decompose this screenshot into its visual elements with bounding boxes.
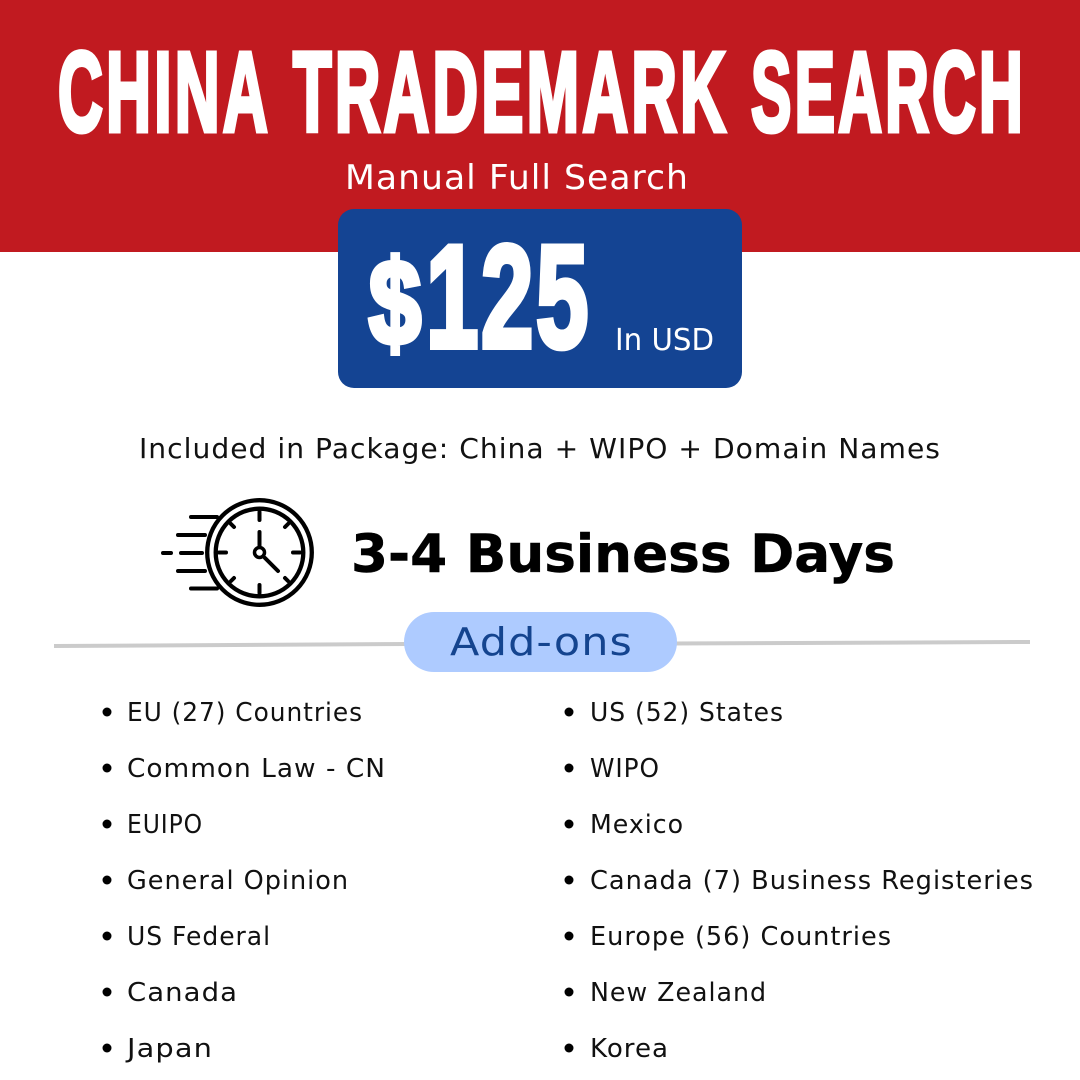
panel: red header band — [0, 0, 1080, 252]
price amount — [369, 215, 591, 378]
panel: price box — [338, 209, 742, 388]
list: add-ons right column: Korea — [590, 1034, 669, 1064]
price amount: $ — [369, 236, 421, 370]
list: add-ons left column: EUIPO — [127, 810, 203, 840]
list: add-ons left column: General Opinion — [127, 866, 349, 896]
list: add-ons right column: Canada (7) Business Registeries — [590, 866, 1034, 896]
title: TRADEMARK — [293, 29, 729, 155]
list: add-ons right column: WIPO — [590, 754, 660, 784]
package inclusions text: Included in Package: China + WIPO + Domain Names — [139, 432, 941, 465]
list: add-ons right column: US (52) States — [590, 698, 784, 728]
turnaround time heading: 3-4 Business Days — [351, 524, 895, 585]
price currency note: In USD — [615, 323, 714, 358]
list: add-ons right column: Mexico — [590, 810, 684, 840]
subtitle: Manual Full Search — [345, 158, 689, 198]
list: add-ons right column: Europe (56) Countries — [590, 922, 892, 952]
list: add-ons left column — [102, 698, 386, 1064]
list: add-ons left column: EU (27) Countries — [127, 698, 363, 728]
price amount: 125 — [426, 215, 591, 378]
list: add-ons left column: Japan — [125, 1034, 213, 1064]
list: add-ons left column: Canada — [127, 978, 238, 1008]
add-ons pill — [404, 612, 677, 672]
title: CHINA — [58, 29, 271, 155]
list: add-ons right column: New Zealand — [590, 978, 767, 1008]
icon: fast clock — [163, 500, 312, 605]
list: add-ons left column: US Federal — [127, 922, 271, 952]
list: add-ons left column: Common Law - CN — [127, 754, 386, 784]
list: add-ons right column — [564, 698, 1034, 1064]
add-ons pill: Add-ons — [450, 620, 633, 664]
